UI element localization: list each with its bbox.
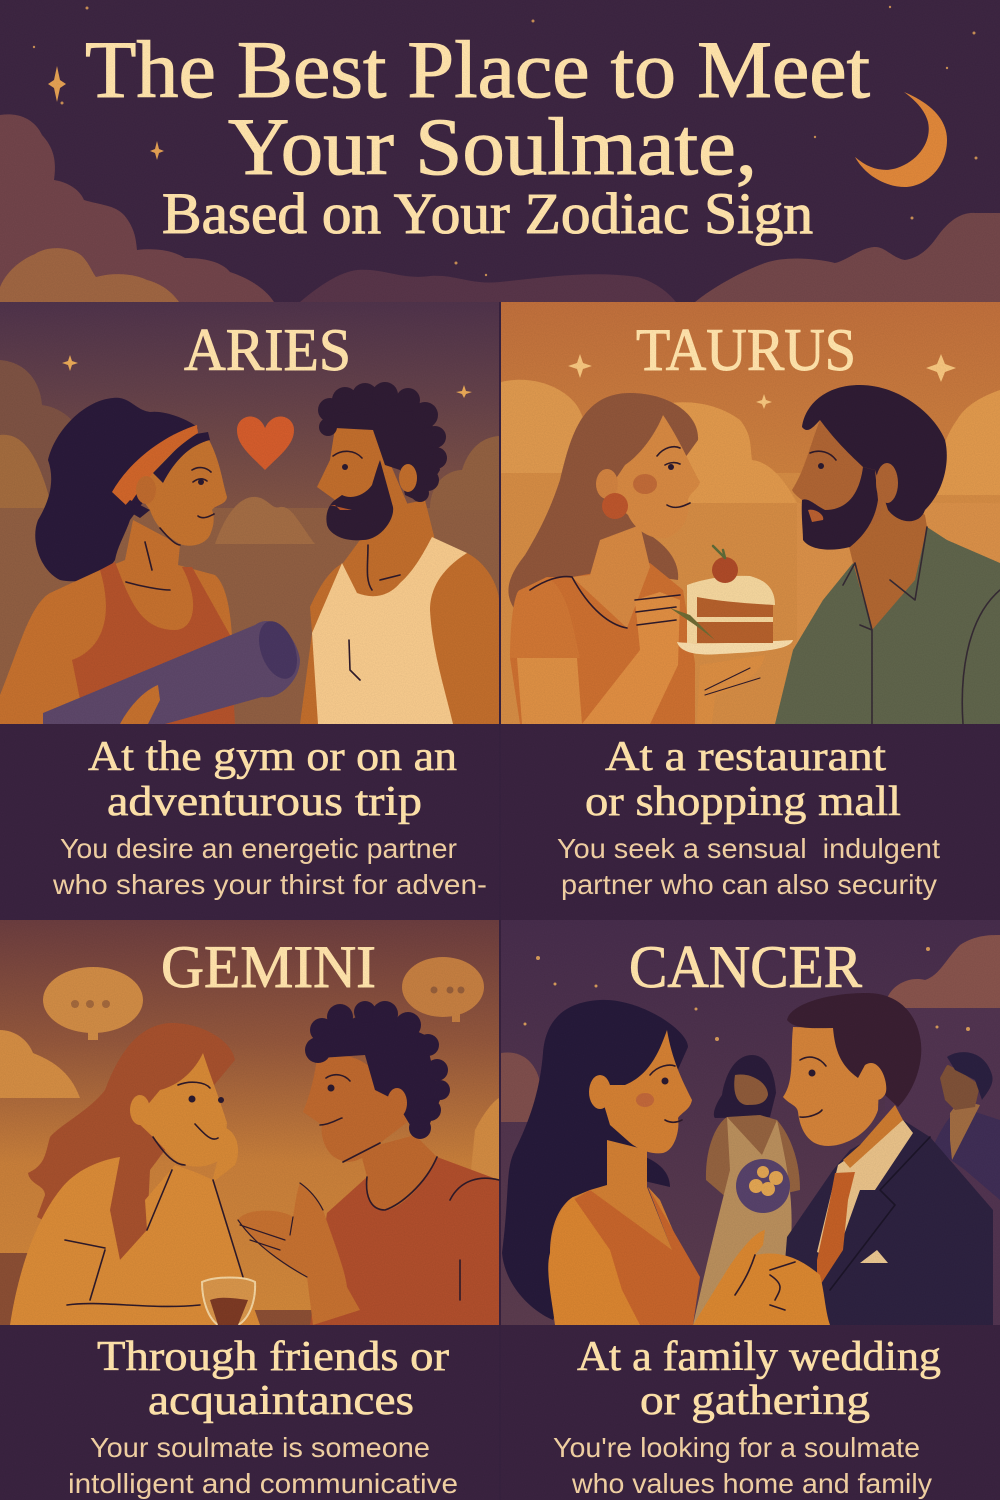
icon: star xyxy=(48,66,66,102)
caption: gemini: acquaintances xyxy=(148,1378,414,1424)
caption: aries: who shares your thirst for adven- xyxy=(52,869,487,900)
icon: heart xyxy=(237,416,294,470)
heading: TAURUS xyxy=(636,317,856,383)
clouds: left xyxy=(0,114,274,302)
icon: star xyxy=(926,354,956,382)
icon: crescent moon xyxy=(855,92,947,187)
title: Your Soulmate, xyxy=(228,101,757,192)
caption: gemini xyxy=(0,1325,499,1500)
clouds: right and middle xyxy=(300,213,1000,302)
hands xyxy=(693,1230,830,1325)
woman xyxy=(10,1023,260,1325)
caption: taurus: At a restaurant xyxy=(605,734,886,780)
caption: taurus: partner who can also security xyxy=(561,869,937,900)
caption: cancer: You're looking for a soulmate xyxy=(553,1432,920,1463)
man xyxy=(780,993,993,1325)
panel: taurus xyxy=(501,302,1000,724)
heading: GEMINI xyxy=(161,934,376,1000)
man xyxy=(775,385,1000,724)
icon: yoga mat xyxy=(43,616,304,724)
icon: small star xyxy=(756,394,772,409)
heading: ARIES xyxy=(184,317,351,383)
icon: star xyxy=(568,354,592,378)
caption: gemini: intolligent and communicative xyxy=(68,1468,458,1499)
caption: cancer xyxy=(501,1325,1000,1500)
heading: CANCER xyxy=(629,934,862,1000)
panel: header xyxy=(0,0,1000,302)
man xyxy=(300,382,499,724)
icon: speech bubble xyxy=(43,967,143,1040)
caption: cancer: or gathering xyxy=(640,1378,870,1424)
curly hair xyxy=(318,382,447,502)
caption: gemini: Through friends or xyxy=(97,1334,449,1380)
title xyxy=(85,24,870,246)
guest xyxy=(933,1052,1000,1200)
icon: glass xyxy=(202,1278,255,1325)
caption: taurus: or shopping mall xyxy=(585,779,901,825)
icon: cake xyxy=(670,546,793,724)
caption: taurus xyxy=(501,724,1000,920)
man xyxy=(238,1001,499,1325)
caption: aries: At the gym or on an xyxy=(88,734,457,780)
panel: aries xyxy=(0,302,499,724)
bride xyxy=(693,1055,800,1325)
title: The Best Place to Meet xyxy=(85,24,870,115)
caption: taurus: You seek a sensual indulgent xyxy=(557,833,940,864)
caption: cancer: At a family wedding xyxy=(577,1334,941,1380)
woman xyxy=(0,398,235,724)
caption: gemini: Your soulmate is someone xyxy=(90,1432,430,1463)
star specks xyxy=(524,947,970,1041)
caption: aries xyxy=(0,724,499,920)
caption: aries: You desire an energetic partner xyxy=(60,833,457,864)
stars xyxy=(62,355,472,398)
curly hair xyxy=(305,1001,450,1139)
title: Based on Your Zodiac Sign xyxy=(162,181,813,246)
panel: cancer xyxy=(501,920,1000,1325)
caption: cancer: who values home and family xyxy=(571,1468,932,1499)
panel: gemini xyxy=(0,920,499,1325)
woman xyxy=(508,393,700,724)
icon: speech bubble xyxy=(402,957,484,1022)
caption: aries: adventurous trip xyxy=(107,779,422,825)
woman xyxy=(502,1000,700,1325)
icon: small star xyxy=(150,141,164,160)
star specks xyxy=(33,6,978,276)
